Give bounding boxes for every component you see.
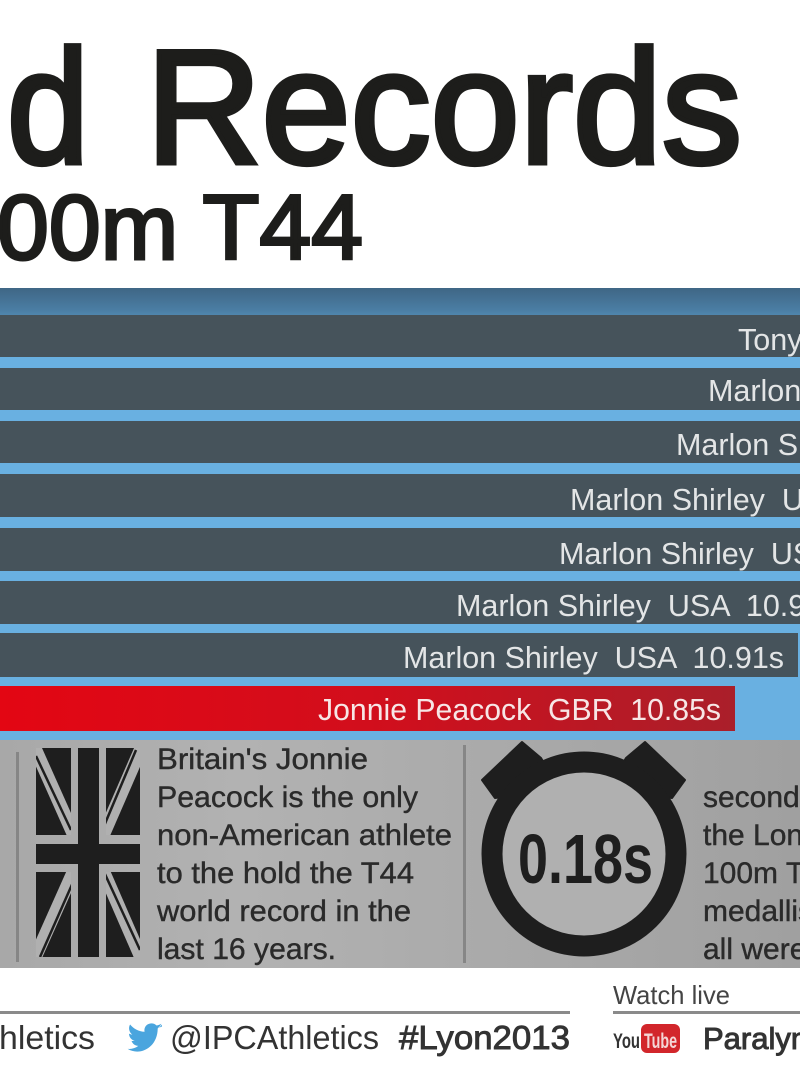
- bar: Jonnie Peacock 10.85s: Jonnie Peacock GBR 10.85s: [318, 693, 721, 727]
- icon: stopwatch 0.18s: 0.18s: [518, 820, 653, 898]
- icon: YouTube logo: Tube: [644, 1030, 677, 1053]
- icon: YouTube logo: [613, 1024, 680, 1053]
- footer: watch live: Watch live: [613, 980, 730, 1010]
- bar: Marlon 3: [0, 421, 800, 463]
- footer: social links: hletics: [0, 1019, 95, 1056]
- bar: Marlon 10.91s: Marlon Shirley USA 10.91s: [403, 641, 784, 675]
- text block: Peacock fact: Peacock is the only: [157, 781, 418, 814]
- hashtag: #Lyon2013: [399, 1019, 570, 1056]
- footer: watch live: [613, 980, 800, 1056]
- text block: Peacock fact: Britain's Jonnie: [157, 743, 368, 776]
- subtitle: 00m T44: [0, 177, 363, 279]
- bar: Marlon 6: [0, 581, 800, 624]
- bar: Tony: [0, 315, 800, 357]
- bar: Marlon 5: [0, 528, 800, 571]
- bar: Marlon 10.91s: [0, 633, 798, 677]
- text block: Peacock fact: non-American athlete: [157, 819, 452, 852]
- bar: Jonnie Peacock 10.85s: [0, 686, 735, 731]
- text block: Peacock fact: to the hold the T44: [157, 857, 414, 890]
- panel: record bar chart: [0, 288, 800, 740]
- panel: facts: [0, 740, 800, 968]
- title: d: [7, 17, 89, 198]
- icon: stopwatch 0.18s: [482, 742, 685, 946]
- icon: union flag: [34, 746, 142, 960]
- text block: Peacock fact: [156, 743, 452, 966]
- text block: Peacock fact: last 16 years.: [157, 933, 336, 966]
- icon: YouTube logo: You: [613, 1030, 640, 1053]
- bar: Marlon 4: [0, 474, 800, 517]
- text block: Peacock fact: world record in the: [156, 895, 411, 928]
- chart header band: [0, 288, 800, 315]
- bar: Marlon 6: Marlon Shirley USA 10.9: [456, 589, 800, 623]
- bar: Marlon 2: [0, 368, 800, 410]
- icon: twitter bird: [128, 1023, 162, 1052]
- bar: Marlon 2: Marlon: [708, 374, 800, 408]
- twitter handle: @IPCAthletics: [170, 1019, 379, 1056]
- footer: social links: [0, 1011, 570, 1056]
- title: Records: [146, 17, 742, 198]
- text block: 0.18 seconds fact: [703, 781, 800, 966]
